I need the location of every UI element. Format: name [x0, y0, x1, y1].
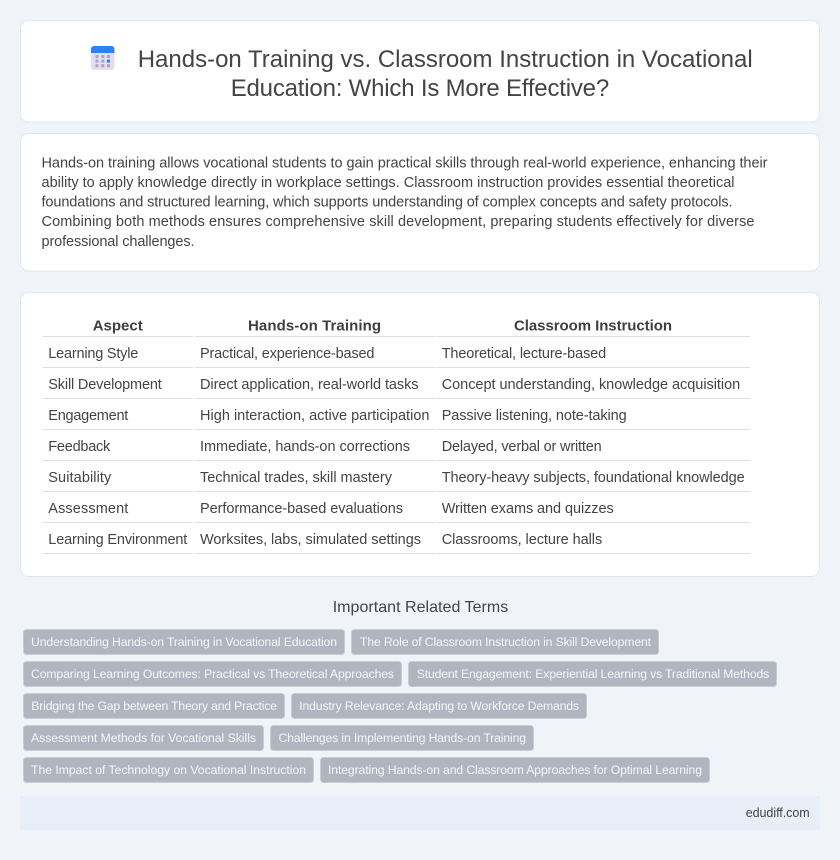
- tag: [24, 630, 344, 654]
- footer source: edudiff.com: [746, 806, 810, 820]
- tag: The Role of Classroom Instruction in Skill Development: [360, 635, 652, 649]
- title: [138, 46, 753, 102]
- table header: Hands-on Training: [248, 318, 381, 335]
- row: Learning Environment: Learning Environment: [48, 532, 187, 548]
- table header: Classroom Instruction: [514, 318, 672, 335]
- title: Hands-on Training vs. Classroom Instruction in Vocational: [138, 46, 753, 73]
- row: Feedback: Delayed, verbal or written: [442, 439, 602, 455]
- row: Engagement: Passive listening, note-taking: [442, 408, 627, 424]
- tag: Challenges in Implementing Hands-on Training: [278, 731, 526, 745]
- row: Feedback: [43, 439, 750, 461]
- row: Assessment: [43, 501, 750, 523]
- text block: introduction: [42, 156, 768, 250]
- tag: Understanding Hands-on Training in Vocational Education: [31, 635, 337, 649]
- table header: Aspect: [93, 318, 143, 335]
- row: Feedback: Feedback: [48, 439, 111, 455]
- tag: Assessment Methods for Vocational Skills: [31, 731, 256, 745]
- icon: calendar: [91, 46, 114, 70]
- row: Skill Development: Concept understanding, knowledge acquisition: [442, 377, 740, 393]
- row: Suitability: Suitability: [48, 470, 112, 486]
- tag: The Impact of Technology on Vocational Instruction: [31, 763, 306, 777]
- row: Learning Style: Theoretical, lecture-based: [442, 346, 606, 362]
- footer bar: [20, 796, 820, 830]
- tag: Student Engagement: Experiential Learning vs Traditional Methods: [417, 667, 769, 681]
- row: Learning Style: Learning Style: [48, 346, 138, 362]
- tag: [352, 630, 658, 654]
- tag: Industry Relevance: Adapting to Workforce Demands: [299, 699, 579, 713]
- row: Learning Environment: [43, 532, 750, 554]
- panel: introduction text: [20, 134, 820, 271]
- row: Learning Style: Practical, experience-based: [200, 346, 374, 362]
- row: Engagement: [43, 408, 750, 430]
- row: Assessment: Written exams and quizzes: [442, 501, 614, 517]
- tag: [24, 662, 402, 686]
- row: Learning Style: [43, 346, 750, 368]
- text block: introduction: professional challenges.: [42, 234, 194, 250]
- row: Engagement: Engagement: [48, 408, 128, 424]
- tag: [320, 758, 710, 782]
- tag: [292, 694, 586, 718]
- panel: comparison table: [20, 292, 820, 576]
- row: Suitability: Technical trades, skill mastery: [200, 470, 393, 486]
- row: Skill Development: Direct application, real-world tasks: [200, 377, 418, 393]
- tag: Bridging the Gap between Theory and Practice: [31, 699, 277, 713]
- text block: introduction: foundations and structured learning, which supports understanding of complex concepts and safety protocols.: [42, 194, 732, 210]
- text block: introduction: ability to apply knowledge directly in workplace settings. Classroom instruction provides essential theoretical: [42, 175, 734, 191]
- row: Skill Development: [43, 377, 750, 399]
- tag: Integrating Hands-on and Classroom Approaches for Optimal Learning: [328, 763, 702, 777]
- text block: introduction: Combining both methods ensures comprehensive skill development, preparing students effectively for diverse: [42, 214, 754, 230]
- text block: introduction: Hands-on training allows vocational students to gain practical skills through real-world experience, enhancing their: [42, 156, 768, 172]
- row: Engagement: High interaction, active participation: [200, 408, 430, 424]
- tag: [24, 758, 314, 782]
- row: Skill Development: Skill Development: [48, 377, 162, 393]
- row: Learning Environment: Classrooms, lecture halls: [442, 532, 602, 548]
- tag: Comparing Learning Outcomes: Practical vs Theoretical Approaches: [31, 667, 394, 681]
- row: Learning Environment: Worksites, labs, simulated settings: [200, 532, 421, 548]
- related term tags: [24, 630, 776, 782]
- table header: [43, 318, 750, 337]
- title: Education: Which Is More Effective?: [231, 75, 609, 102]
- tag: [24, 694, 284, 718]
- tag: [270, 726, 534, 750]
- row: Suitability: Theory-heavy subjects, foundational knowledge: [442, 470, 745, 486]
- row: Feedback: Immediate, hands-on corrections: [200, 439, 410, 455]
- heading: important related terms: Important Related Terms: [333, 599, 508, 616]
- row: Assessment: Performance-based evaluations: [200, 501, 403, 517]
- tag: [408, 662, 776, 686]
- row: Assessment: Assessment: [48, 501, 128, 517]
- panel: title card: [20, 20, 820, 122]
- row: Suitability: [43, 470, 750, 492]
- tag: [24, 726, 264, 750]
